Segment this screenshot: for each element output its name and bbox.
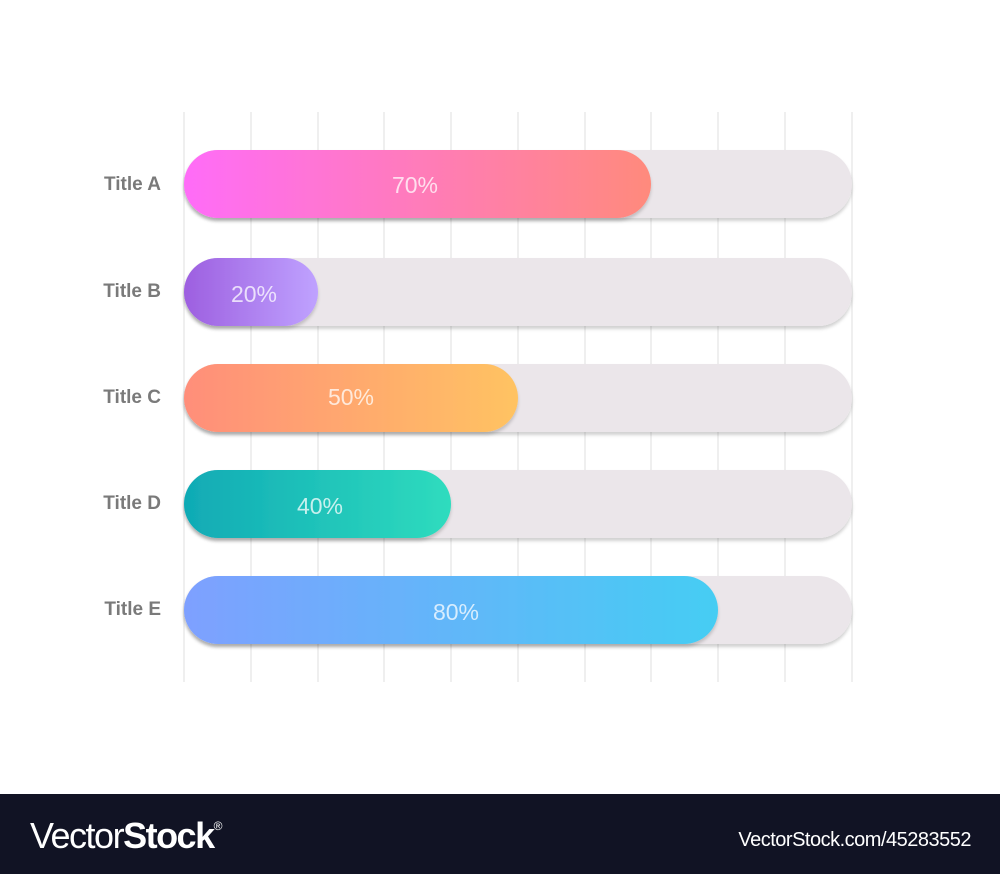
track A	[184, 150, 852, 218]
value A: 70%	[392, 172, 438, 198]
footer logo: ®	[214, 819, 223, 833]
label E: Title E	[104, 599, 161, 620]
footer band	[0, 794, 1000, 874]
track C	[184, 364, 852, 432]
label B: Title B	[103, 281, 161, 302]
bar D 40%	[184, 470, 451, 538]
row: Title E	[104, 576, 852, 644]
row: Title A	[104, 150, 852, 218]
bar A 70%	[184, 150, 651, 218]
row: Title D	[103, 470, 852, 538]
value D: 40%	[297, 493, 343, 519]
bar E 80%	[184, 576, 718, 644]
footer logo: VectorStock	[30, 815, 214, 856]
bar B 20%	[184, 258, 318, 326]
row: Title B	[103, 258, 852, 326]
row: Title C	[103, 364, 852, 432]
track D	[184, 470, 852, 538]
label D: Title D	[103, 493, 161, 514]
bar C 50%	[184, 364, 518, 432]
track E	[184, 576, 852, 644]
value E: 80%	[433, 599, 479, 625]
label A: Title A	[104, 174, 161, 195]
footer url: VectorStock.com/45283552	[738, 829, 971, 851]
label C: Title C	[103, 387, 161, 408]
value C: 50%	[328, 384, 374, 410]
value B: 20%	[231, 281, 277, 307]
track B	[184, 258, 852, 326]
